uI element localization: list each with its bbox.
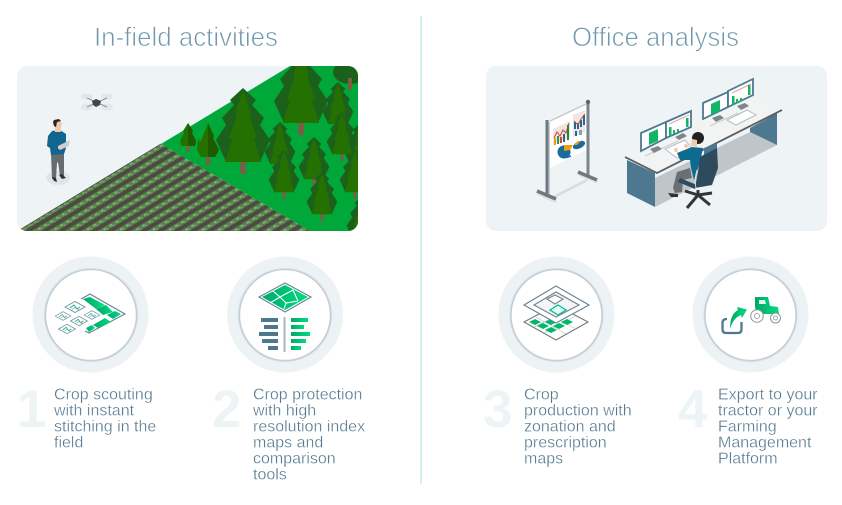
step 1 number: 1 [17, 380, 46, 439]
whiteboard [537, 100, 597, 202]
step 2 text: with high [252, 402, 316, 420]
divider between sections [420, 16, 422, 484]
icon: person with tablet [46, 119, 70, 185]
icon: export arrow to tractor [722, 297, 780, 333]
step 4 text: tractor or your [718, 402, 818, 420]
step 3 text: production with [524, 402, 632, 420]
pie charts [558, 139, 586, 158]
step 3 text [524, 386, 632, 468]
small tree [180, 123, 196, 152]
icon: zonation and prescription layers [524, 286, 589, 340]
step 3 text: Crop [524, 386, 559, 404]
step 3 number: 3 [483, 380, 512, 439]
step 1 icon circle [32, 256, 148, 372]
step 3 text: prescription [524, 434, 607, 452]
icon: stitched crop images [55, 294, 125, 334]
step 2 icon circle [227, 256, 343, 372]
step 3 text: maps [524, 450, 563, 468]
step 1 text [53, 386, 156, 452]
step 1 text: Crop scouting [54, 386, 153, 404]
panel: office illustration [486, 66, 827, 231]
office worker on chair [668, 132, 718, 208]
step 2 number: 2 [212, 380, 241, 439]
step 2 text: comparison [253, 450, 336, 468]
step 4 icon circle [692, 256, 808, 372]
step 4 text: Platform [718, 450, 778, 468]
step 1 text: with instant [53, 402, 135, 420]
step 4 text: Farming [718, 418, 777, 436]
step 2 text [252, 386, 365, 484]
title: In-field activities: In-field activities [94, 22, 278, 52]
monitors [641, 79, 753, 156]
chart on whiteboard [553, 121, 570, 145]
icon: drone [81, 94, 113, 110]
medium tree [197, 123, 219, 165]
keyboards [665, 110, 756, 158]
step 3 text: zonation and [524, 418, 616, 436]
step 1 text: field [54, 434, 83, 452]
icon: index map and comparison bars [259, 283, 311, 352]
step 1 text: stitching in the [54, 418, 156, 436]
panel: in-field illustration [17, 66, 358, 231]
step 3 icon circle [498, 256, 614, 372]
chart on whiteboard [573, 110, 585, 137]
step 4 text: Export to your [718, 386, 818, 404]
step 4 text [718, 386, 818, 468]
step 2 text: maps and [253, 434, 323, 452]
step 2 text: tools [253, 466, 287, 484]
step 2 text: Crop protection [253, 386, 362, 404]
desk [625, 94, 782, 207]
title: Office analysis: Office analysis [572, 22, 739, 52]
step 4 text: Management [718, 434, 812, 452]
step 2 text: resolution index [253, 418, 365, 436]
step 4 number: 4 [678, 380, 708, 439]
